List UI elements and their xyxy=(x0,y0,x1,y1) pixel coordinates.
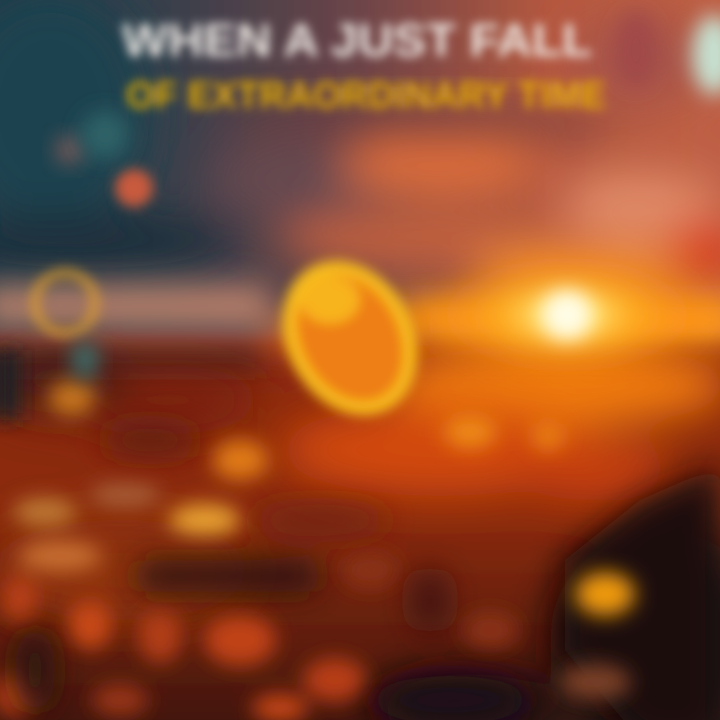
bright light over dark rooftops xyxy=(559,572,635,700)
city lights xyxy=(0,416,564,720)
sky clouds xyxy=(0,0,720,296)
yellow ring shape xyxy=(266,246,434,430)
small icons left xyxy=(0,111,153,420)
title xyxy=(122,14,606,117)
dark rooftops xyxy=(15,426,720,720)
sun xyxy=(422,249,712,381)
top-right badge xyxy=(614,12,720,95)
ground colour fields xyxy=(0,343,720,720)
title: WHEN A JUST FALL xyxy=(122,14,592,66)
title: OF EXTRAORDINARY TIME xyxy=(126,75,606,117)
horizon glow band xyxy=(0,285,720,365)
